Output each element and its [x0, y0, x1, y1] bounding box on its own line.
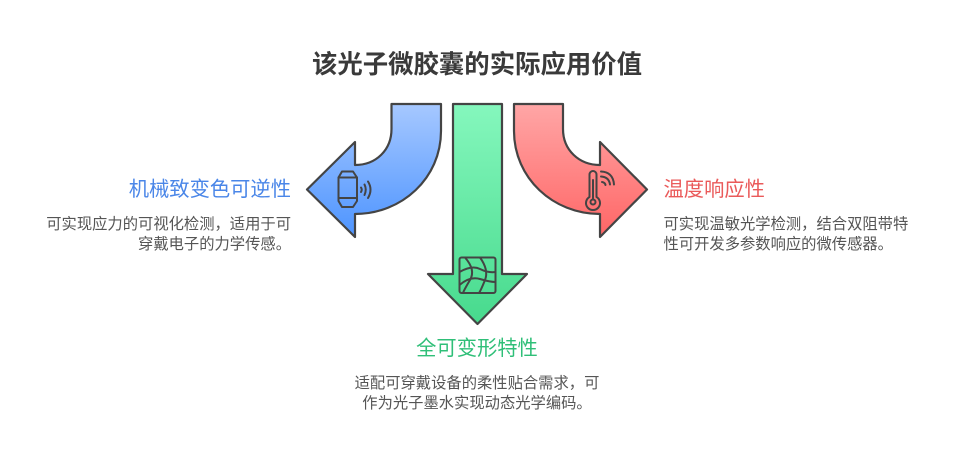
heading: mechanochromic: 机械致变色可逆性	[129, 179, 291, 201]
heading: deformable: 全可变形特性	[416, 338, 538, 360]
text: temperature description: 可实现温敏光学检测，结合双阻带特	[664, 216, 908, 232]
text: temperature description: 性可开发多参数响应的微传感器。	[664, 236, 893, 252]
text: mechanochromic description	[46, 216, 291, 252]
text: deformable description: 适配可穿戴设备的柔性贴合需求，可	[355, 375, 599, 392]
text: deformable description: 作为光子墨水实现动态光学编码。	[362, 395, 592, 412]
icon: smartwatch	[338, 172, 370, 207]
text: temperature description	[664, 216, 908, 252]
arrow: green down	[428, 104, 527, 324]
icon: deformable grid	[460, 258, 496, 293]
text: mechanochromic description: 可实现应力的可视化检测，适用于可	[46, 216, 291, 232]
text: deformable description	[355, 374, 599, 412]
title: 该光子微胶囊的实际应用价值	[312, 50, 642, 78]
heading: temperature: 温度响应性	[664, 179, 765, 201]
icon: thermometer	[586, 171, 614, 210]
arrow: blue left	[307, 104, 441, 237]
arrow: red right	[514, 104, 647, 237]
text: mechanochromic description: 穿戴电子的力学传感。	[138, 236, 291, 252]
